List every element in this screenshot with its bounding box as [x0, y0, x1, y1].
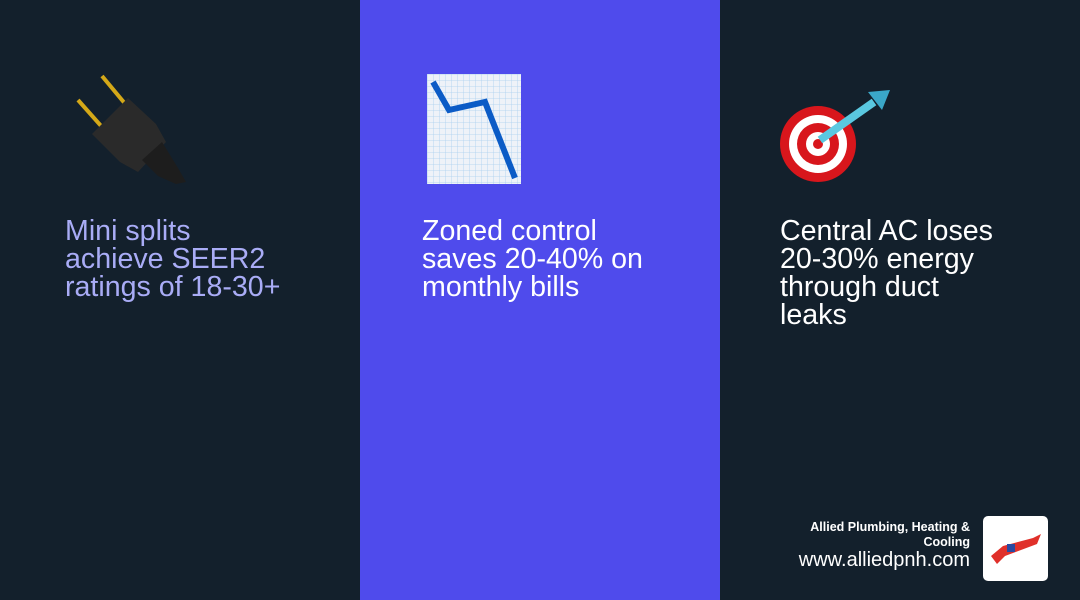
text: central AC: leaks	[780, 299, 847, 331]
company name	[810, 520, 970, 549]
text: zoned control	[422, 215, 643, 303]
text: zoned control: monthly bills	[422, 271, 579, 303]
text: central AC	[780, 215, 993, 331]
panel: middle	[360, 0, 720, 600]
footer: company info	[798, 516, 1048, 581]
logo	[983, 516, 1048, 581]
text: central AC: 20-30% energy	[780, 243, 974, 275]
company name: Cooling	[923, 535, 970, 549]
text: central AC: through duct	[780, 271, 939, 303]
icon: target	[780, 90, 890, 182]
text: mini splits	[65, 215, 280, 303]
icon: plug	[76, 74, 186, 184]
text: mini splits: achieve SEER2	[65, 243, 265, 275]
company name: Allied Plumbing, Heating &	[810, 520, 970, 534]
text: mini splits: Mini splits	[65, 215, 191, 247]
panel: right	[720, 0, 1080, 600]
panel: left	[0, 0, 360, 600]
text: zoned control: saves 20-40% on	[422, 243, 643, 275]
text: zoned control: Zoned control	[422, 215, 597, 247]
website: www.alliedpnh.com	[799, 549, 970, 571]
text: central AC: Central AC loses	[780, 215, 993, 247]
icon: chart decreasing	[427, 74, 521, 184]
text: mini splits: ratings of 18-30+	[65, 271, 280, 303]
